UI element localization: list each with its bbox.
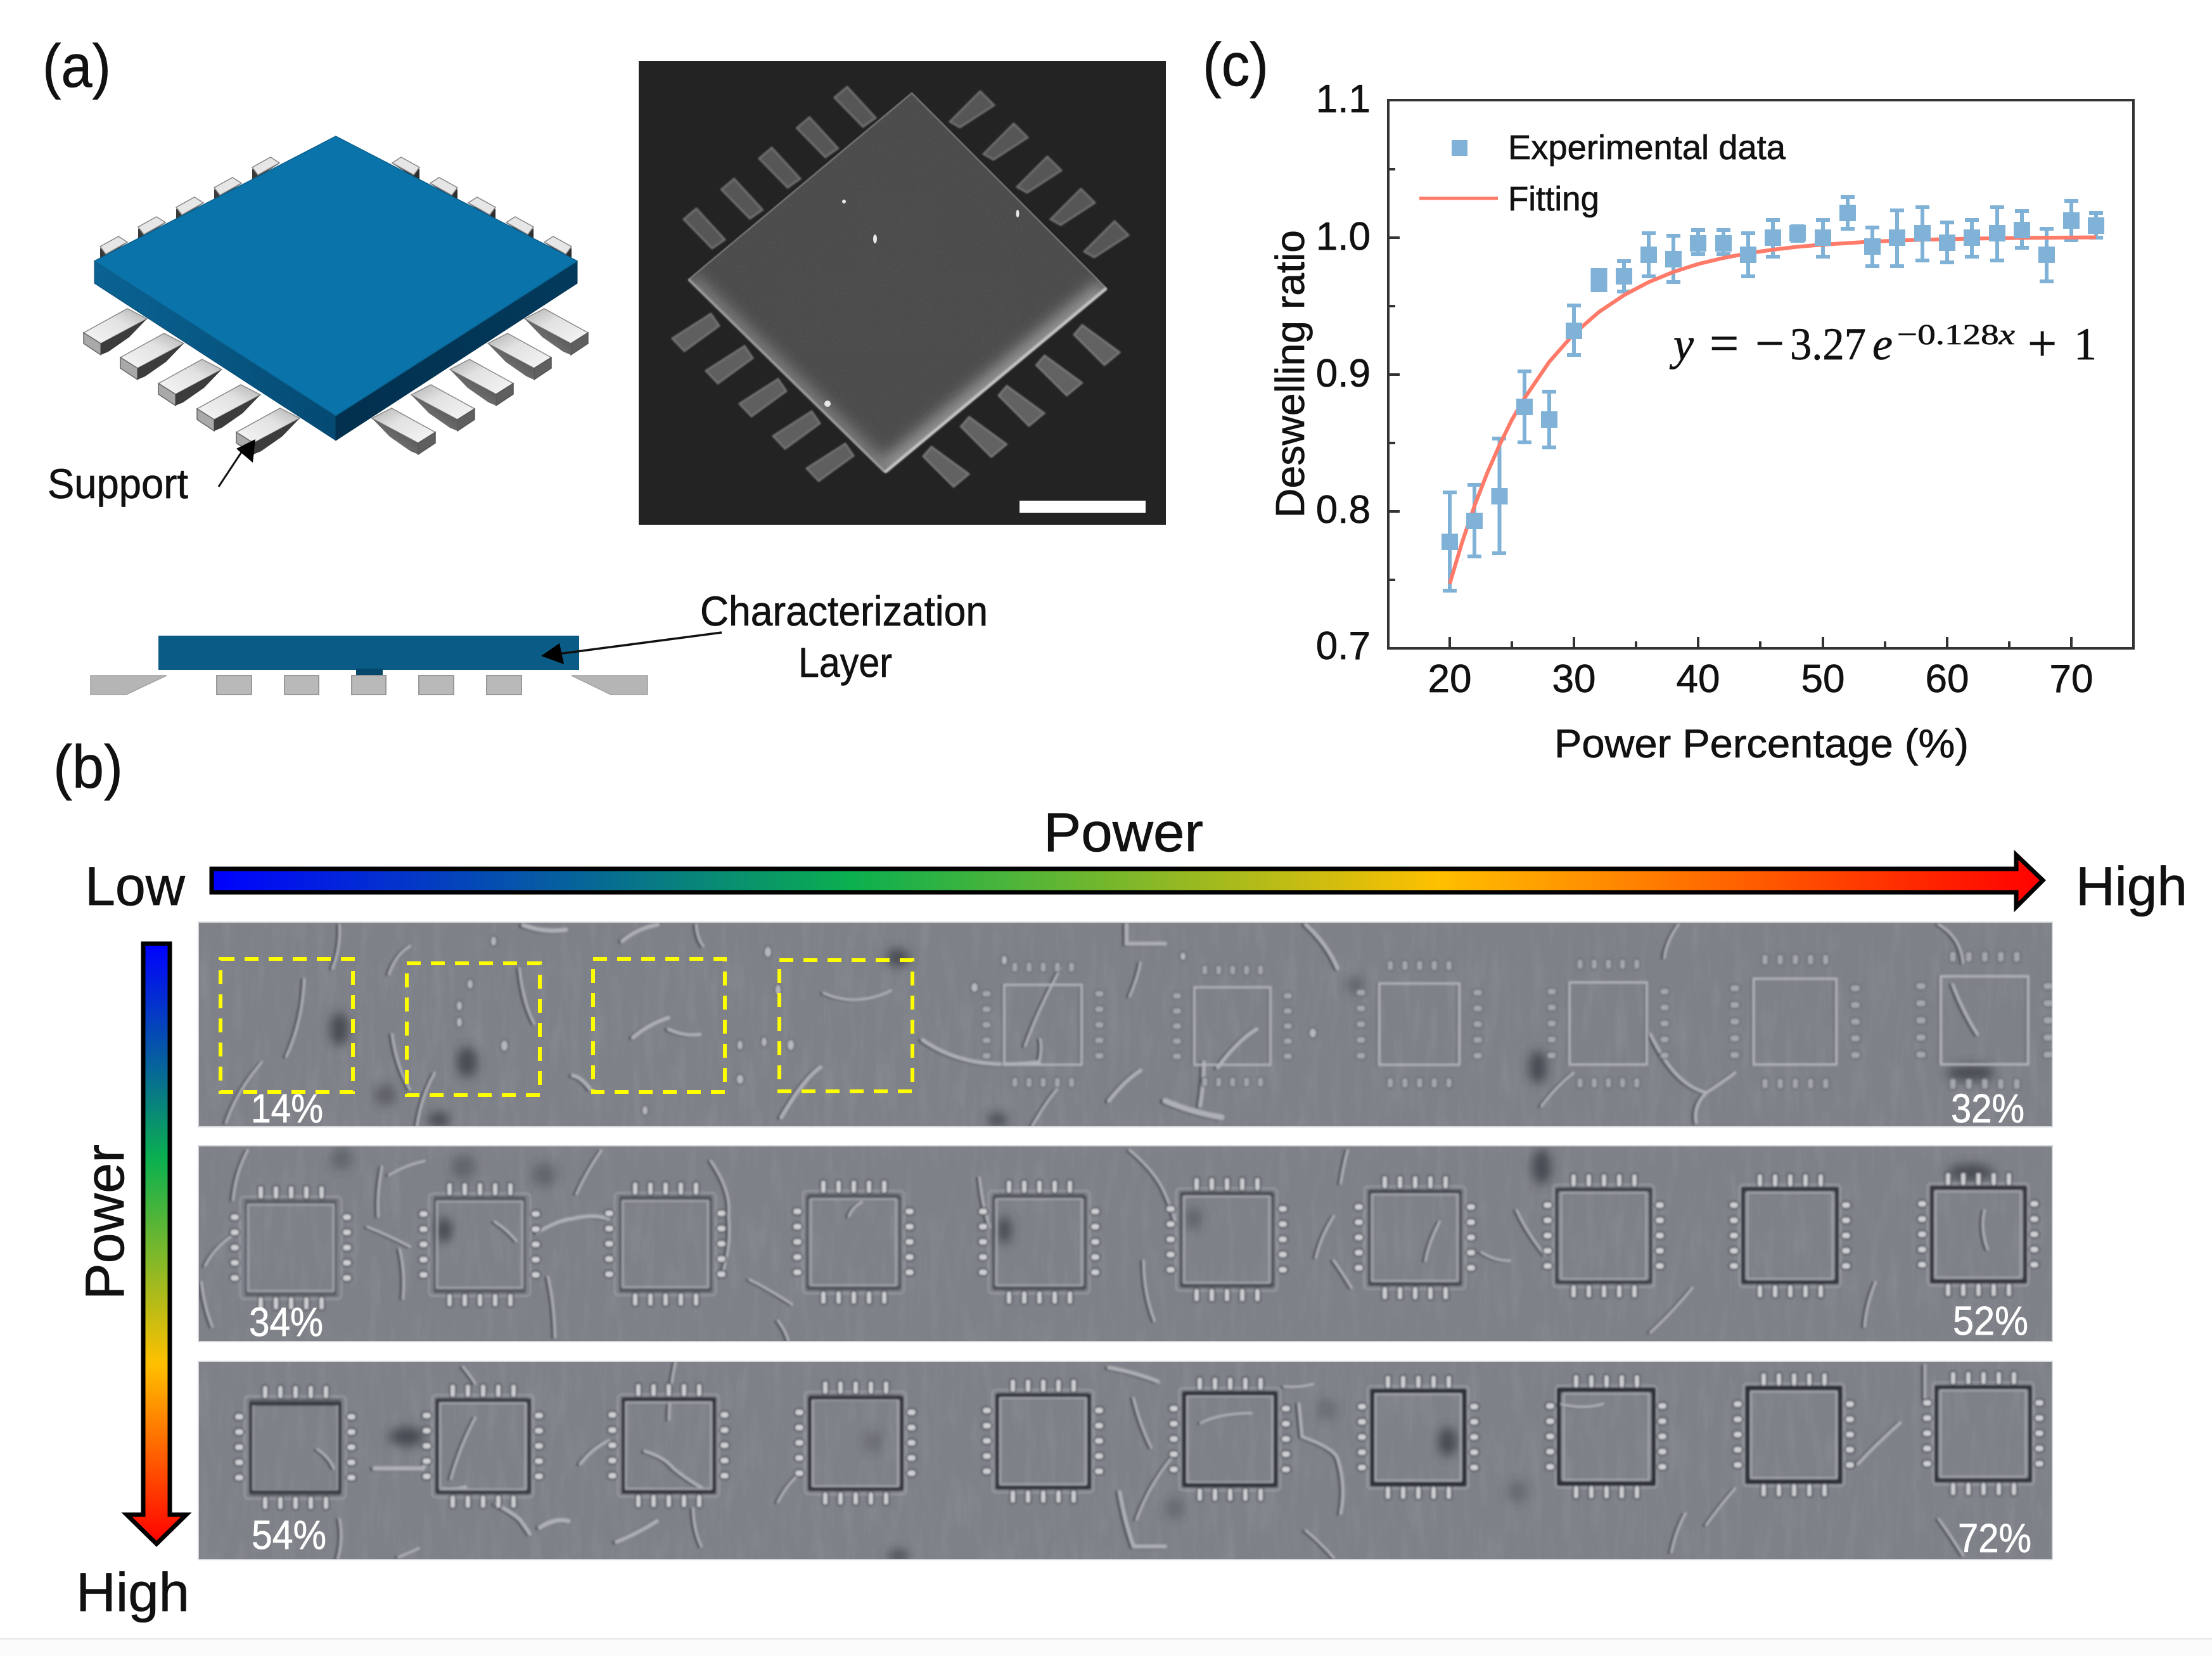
fit equation: + bbox=[2028, 314, 2057, 372]
support label: Support bbox=[48, 460, 188, 507]
x axis title: Power Percentage (%) bbox=[1554, 722, 1969, 766]
panel label b: (b) bbox=[53, 733, 123, 801]
row 3 micro-supports, 54% to 72% bbox=[234, 1371, 2044, 1510]
panel a bbox=[42, 32, 1166, 695]
side-view schematic bbox=[91, 636, 648, 695]
vertical power label: Power bbox=[75, 1145, 136, 1300]
vertical power gradient arrow bbox=[127, 944, 186, 1544]
x axis tick labels: 30 bbox=[1552, 657, 1595, 701]
yellow dashed box 4 bbox=[779, 960, 912, 1091]
data markers bbox=[1442, 205, 2104, 550]
high label, right: High bbox=[2076, 856, 2187, 917]
percent label 72%: 72% bbox=[1958, 1515, 2031, 1561]
3D model of suspended layer on supports bbox=[84, 136, 588, 454]
yellow dashed box 1 bbox=[221, 959, 353, 1092]
y axis tick labels: 1.0 bbox=[1316, 215, 1371, 259]
arrow to support bbox=[219, 439, 255, 487]
x axis tick labels: 60 bbox=[1926, 657, 1969, 701]
fit equation: e bbox=[1872, 319, 1893, 369]
y axis tick labels: 1.1 bbox=[1316, 77, 1371, 121]
panel b bbox=[53, 733, 2187, 1623]
percent label 54%: 54% bbox=[252, 1512, 326, 1558]
legend: Experimental data bbox=[1508, 129, 1786, 167]
yellow dashed box 3 bbox=[593, 959, 725, 1092]
y axis tick labels bbox=[1316, 77, 1371, 668]
percent label 34%: 34% bbox=[249, 1299, 323, 1345]
fit equation: y bbox=[1669, 319, 1694, 369]
panel c bbox=[1203, 31, 2133, 766]
x axis tick labels: 40 bbox=[1677, 657, 1720, 701]
axis ticks bbox=[1388, 169, 2071, 648]
row 1 micro-supports, 14% to 32% bbox=[982, 951, 2054, 1089]
power heading: Power bbox=[1044, 802, 1203, 863]
arrow to characterization layer bbox=[541, 632, 722, 664]
microscope image strips bbox=[198, 921, 2054, 1561]
y axis tick labels: 0.8 bbox=[1316, 488, 1371, 532]
fit equation: 3.27 bbox=[1790, 319, 1866, 369]
y axis title: Deswelling ratio bbox=[1267, 230, 1313, 518]
percent label 32%: 32% bbox=[1951, 1086, 2024, 1131]
percent label 14%: 14% bbox=[251, 1086, 323, 1131]
error bars bbox=[1443, 197, 2103, 591]
plot frame bbox=[1388, 100, 2133, 648]
fit equation: − bbox=[1755, 314, 1784, 372]
panel label a: (a) bbox=[42, 32, 111, 100]
SEM scale bar bbox=[1020, 501, 1146, 513]
fitted curve bbox=[1450, 237, 2096, 584]
fit equation: = bbox=[1710, 314, 1739, 372]
characterization label line 2: Layer bbox=[798, 639, 892, 686]
fit equation: 1 bbox=[2074, 319, 2097, 369]
x axis tick labels bbox=[1428, 657, 2093, 701]
y axis tick labels: 0.7 bbox=[1316, 624, 1371, 668]
characterization label line 1: Characterization bbox=[700, 587, 988, 634]
x axis tick labels: 20 bbox=[1428, 657, 1471, 701]
high label, bottom: High bbox=[76, 1562, 189, 1623]
fit equation: −0.128 x bbox=[1897, 318, 2016, 350]
SEM image bbox=[639, 61, 1166, 525]
percent label 52%: 52% bbox=[1953, 1298, 2028, 1344]
y axis tick labels: 0.9 bbox=[1316, 352, 1371, 395]
legend: Fitting bbox=[1508, 180, 1599, 218]
horizontal power gradient arrow bbox=[212, 855, 2043, 907]
fit equation bbox=[1669, 314, 2097, 372]
legend bbox=[1419, 129, 1786, 218]
yellow dashed box 2 bbox=[407, 963, 540, 1095]
panel label c: (c) bbox=[1203, 31, 1269, 99]
low label: Low bbox=[85, 856, 186, 917]
x axis tick labels: 70 bbox=[2050, 657, 2093, 701]
x axis tick labels: 50 bbox=[1801, 657, 1844, 701]
row 2 micro-supports, 34% to 52% bbox=[230, 1172, 2039, 1310]
